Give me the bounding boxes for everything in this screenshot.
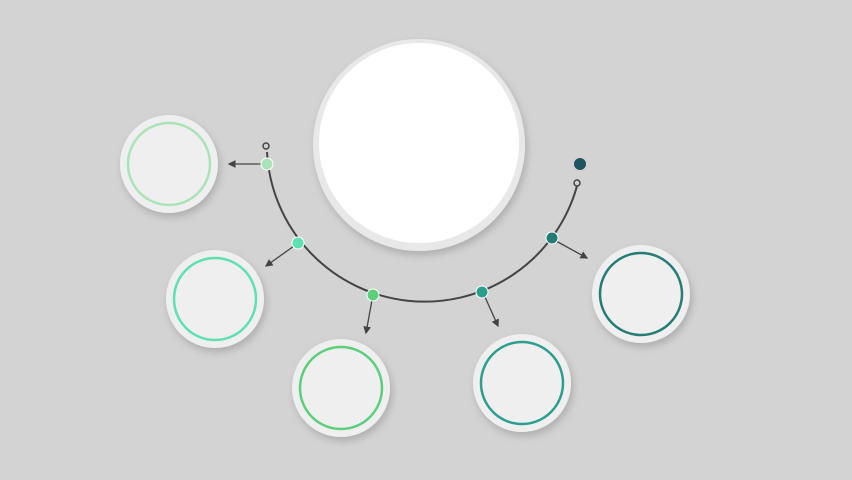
node 2 xyxy=(166,250,264,348)
arc dots xyxy=(261,158,558,301)
node 5 xyxy=(592,245,690,343)
dark dot xyxy=(574,158,586,170)
main circle xyxy=(313,39,525,251)
node 4 xyxy=(473,334,571,432)
arrows xyxy=(229,164,587,333)
node 3 xyxy=(292,339,390,437)
arc connector xyxy=(263,143,580,302)
node 1 xyxy=(120,115,218,213)
